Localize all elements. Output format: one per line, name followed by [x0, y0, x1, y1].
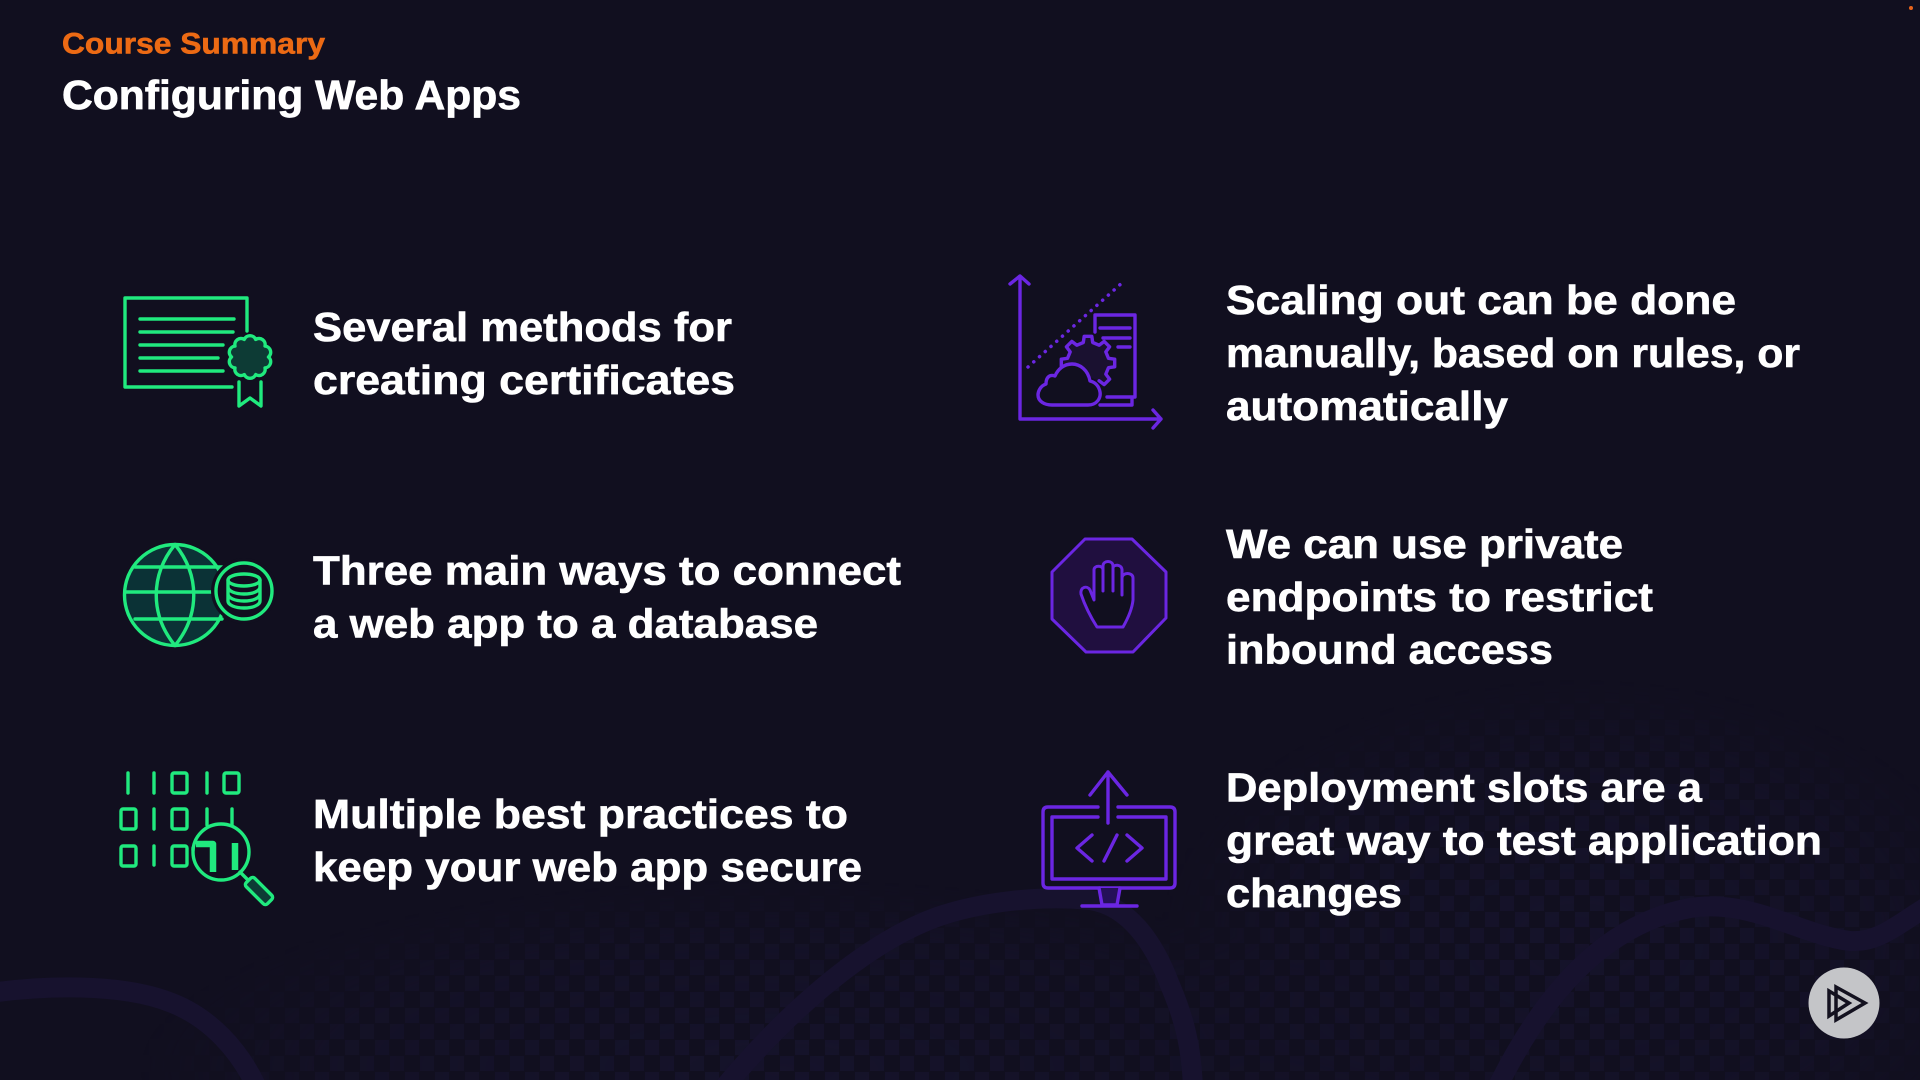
- text: certificates: creating certificates: [313, 357, 735, 403]
- icon: binary data with magnifier: [121, 773, 274, 906]
- text: database: Three main ways to connect: [313, 548, 901, 594]
- text: deployment slots: great way to test application: [1226, 818, 1822, 864]
- text: scaling: [1226, 277, 1800, 429]
- icon: globe and database: [124, 544, 277, 646]
- text: scaling: automatically: [1226, 383, 1508, 429]
- text: deployment slots: [1226, 764, 1822, 916]
- corner dot: [1909, 6, 1913, 10]
- text: scaling: Scaling out can be done: [1226, 277, 1736, 323]
- text: best practices: [313, 791, 862, 890]
- play logo button: [1808, 968, 1880, 1038]
- text: private endpoints: endpoints to restrict: [1226, 574, 1653, 620]
- text: best practices: keep your web app secure: [313, 844, 862, 890]
- text: certificates: [313, 304, 735, 403]
- text: private endpoints: inbound access: [1226, 626, 1553, 672]
- text: private endpoints: [1226, 521, 1653, 672]
- eyebrow: Course Summary: Course Summary: [62, 28, 325, 60]
- icon: certificate: [125, 298, 271, 406]
- text: scaling: manually, based on rules, or: [1226, 330, 1800, 376]
- icon: scaling chart: [1010, 276, 1161, 428]
- text: database: [313, 548, 901, 646]
- text: deployment slots: Deployment slots are a: [1226, 764, 1703, 810]
- title: Configuring Web Apps: Configuring Web Apps: [62, 72, 521, 118]
- icon: stop sign with hand: [1052, 539, 1166, 652]
- background waves: [0, 803, 1920, 1080]
- text: private endpoints: We can use private: [1226, 521, 1623, 567]
- text: database: a web app to a database: [313, 600, 818, 646]
- text: best practices: Multiple best practices to: [313, 791, 848, 837]
- icon: monitor with deploy arrow: [1043, 772, 1175, 906]
- text: certificates: Several methods for: [313, 304, 732, 350]
- text: deployment slots: changes: [1226, 870, 1402, 916]
